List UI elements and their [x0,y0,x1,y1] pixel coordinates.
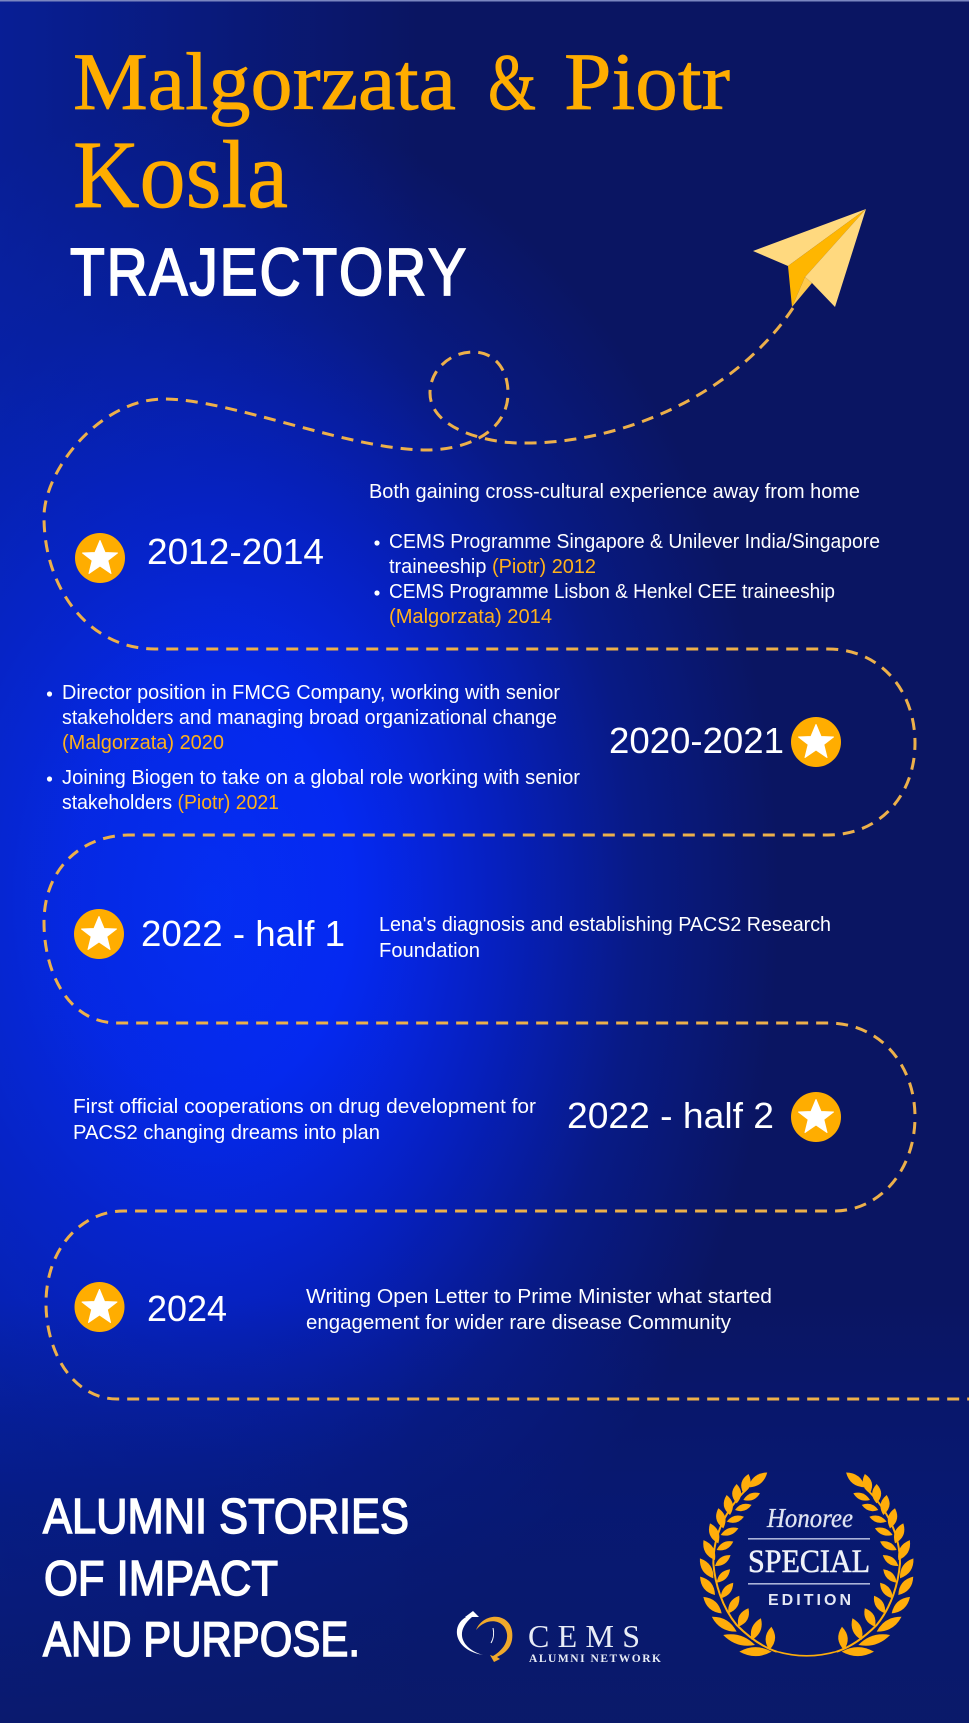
description: Foundation [379,940,480,962]
year: 2024 [147,1288,227,1329]
year: 2022 - half 1 [141,913,345,954]
description: (Malgorzata) 2020 [62,732,224,754]
description: Both gaining cross-cultural experience away from home [369,481,860,503]
description: traineeship (Piotr) 2012 [389,556,596,578]
description [306,1286,772,1334]
milestone 2022 half 2 [73,1092,841,1144]
laurel wreath [696,1469,917,1656]
year: 2020-2021 [609,720,784,761]
description: engagement for wider rare disease Community [306,1312,731,1334]
milestone 2012-2014 [75,481,880,628]
description: CEMS Programme Singapore & Unilever India/Singapore [389,531,880,553]
description [369,481,880,628]
milestone 2024 [74,1282,772,1334]
description: stakeholders (Piotr) 2021 [62,792,279,814]
tagline: ALUMNI STORIES [43,1490,409,1544]
tagline: AND PURPOSE. [43,1613,360,1667]
badge: honoree special edition: SPECIAL [748,1544,870,1580]
title: Piotr [564,36,730,127]
description: Lena's diagnosis and establishing PACS2 Research [379,914,831,936]
description: Director position in FMCG Company, working with senior [62,682,560,704]
description: First official cooperations on drug development for [73,1096,536,1118]
icon: star [74,909,124,959]
milestone 2020-2021 [47,682,841,814]
description: stakeholders and managing broad organizational change [62,707,557,729]
logo: CEMS Alumni Network [457,1611,661,1665]
year: 2012-2014 [147,531,324,572]
tagline [43,1490,409,1667]
icon: star [791,717,841,767]
tagline: OF IMPACT [44,1552,278,1606]
dashed flight path [44,308,969,1399]
icon: star [791,1092,841,1142]
icon: star [75,533,125,583]
description: PACS2 changing dreams into plan [73,1122,380,1144]
description: Writing Open Letter to Prime Minister what started [306,1286,772,1308]
title [73,36,730,228]
icon: star [74,1282,124,1332]
description: Joining Biogen to take on a global role working with senior [62,767,580,789]
title: & [488,39,536,127]
logo: CEMS Alumni Network: CEMS [528,1618,640,1654]
badge: honoree special edition: EDITION [768,1592,851,1609]
description [73,1096,536,1144]
badge: honoree special edition [696,1469,917,1656]
description [379,914,831,962]
heading: trajectory: TRAJECTORY [70,236,466,310]
description [47,682,580,814]
title: Kosla [73,121,288,228]
icon: swirl [457,1611,512,1662]
logo: CEMS Alumni Network: ALUMNI NETWORK [529,1653,661,1665]
icon: paper plane [753,209,866,307]
milestone 2022 half 1 [74,909,831,962]
description: CEMS Programme Lisbon & Henkel CEE traineeship [389,581,835,603]
badge: honoree special edition: Honoree [766,1503,853,1533]
year: 2022 - half 2 [567,1095,774,1136]
title: Malgorzata [73,36,456,127]
description: (Malgorzata) 2014 [389,606,552,628]
